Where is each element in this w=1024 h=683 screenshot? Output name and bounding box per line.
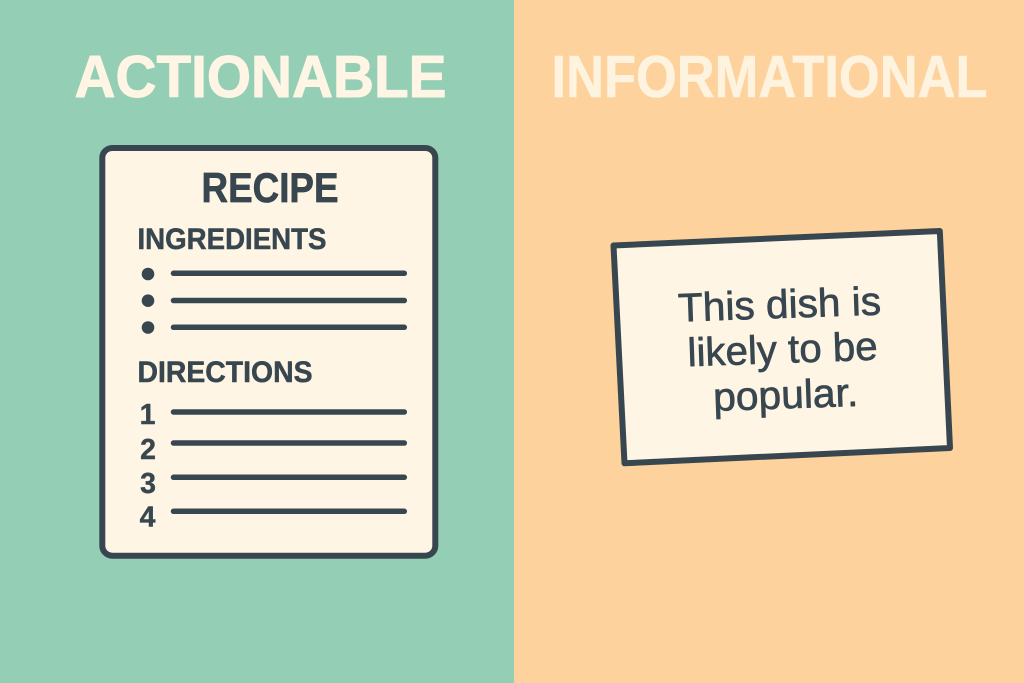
statement text — [677, 280, 885, 421]
statement text: likely to be — [687, 325, 878, 375]
ingredients heading: INGREDIENTS — [138, 223, 326, 256]
directions list: 4 — [140, 502, 156, 534]
statement card — [614, 231, 950, 463]
directions list: 3 — [140, 468, 156, 500]
statement text: popular. — [712, 371, 859, 420]
directions list: 2 — [140, 434, 156, 466]
heading: actionable: ACTIONABLE — [74, 44, 446, 110]
directions list — [140, 399, 404, 534]
card frame — [102, 148, 435, 556]
ingredients list — [142, 268, 404, 334]
directions heading: DIRECTIONS — [138, 356, 312, 389]
recipe title: RECIPE — [202, 164, 338, 211]
card frame — [614, 231, 950, 463]
recipe card — [102, 148, 435, 556]
directions list: 1 — [140, 399, 156, 431]
panel: informational background — [514, 0, 1024, 683]
panel: actionable background — [0, 0, 514, 683]
statement text: This dish is — [677, 280, 882, 331]
